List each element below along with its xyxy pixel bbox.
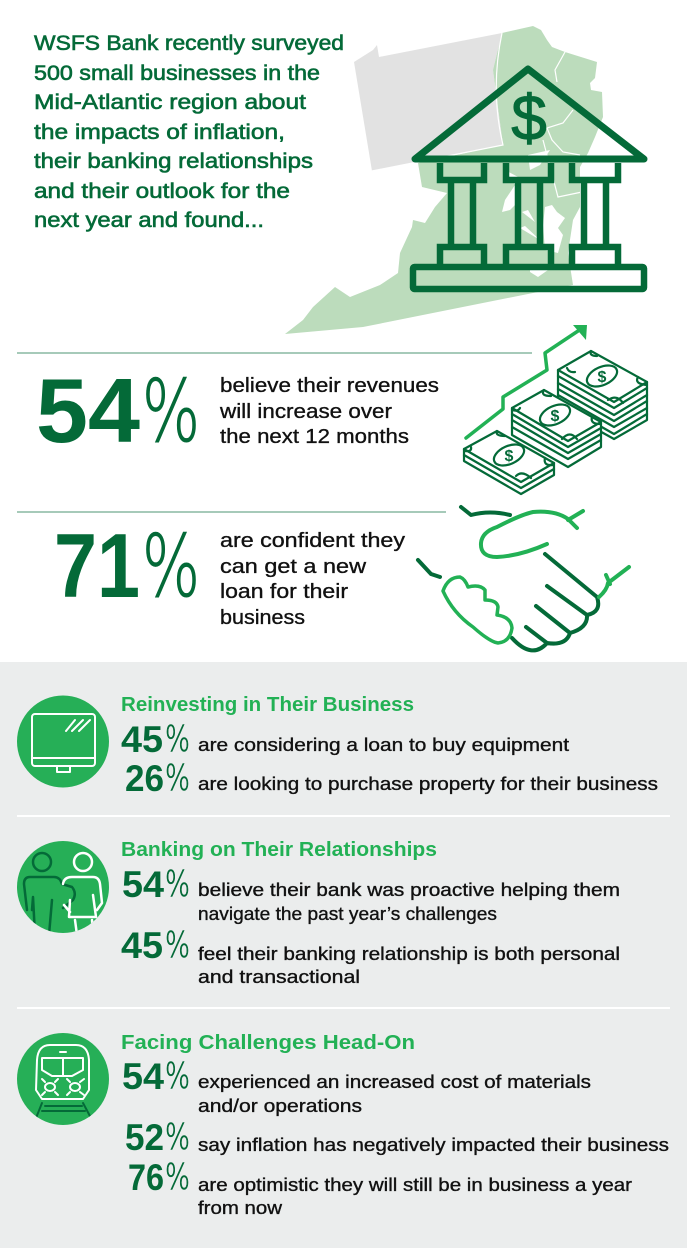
section: Reinvesting in Their Business: are looking to purchase property for their business	[198, 774, 658, 794]
stat: 54% revenues: the next 12 months	[220, 426, 409, 448]
section: Facing Challenges Head-On: experienced an increased cost of materials	[198, 1072, 591, 1092]
stat: 71% loan confidence: 71	[54, 516, 140, 617]
stat: 71% loan confidence: can get a new	[220, 556, 367, 578]
map of the Mid-Atlantic region	[285, 26, 603, 334]
intro text: their banking relationships	[34, 150, 313, 173]
stat: 71% loan confidence	[17, 512, 446, 629]
section: Facing Challenges Head-On: %	[165, 1117, 190, 1158]
section: Facing Challenges Head-On: 52	[125, 1117, 164, 1158]
intro text: WSFS Bank recently surveyed	[34, 32, 344, 55]
section: Banking on Their Relationships: navigate the past year’s challenges	[198, 904, 497, 924]
section: Facing Challenges Head-On: 54	[122, 1056, 164, 1097]
stat: 54% revenues: believe their revenues	[220, 375, 439, 397]
section: Banking on Their Relationships: %	[165, 925, 190, 966]
stat: 71% loan confidence: %	[142, 517, 200, 617]
section: Reinvesting in Their Business: %	[165, 758, 190, 799]
intro text: 500 small businesses in the	[34, 62, 320, 85]
section: Banking on Their Relationships: 45	[121, 925, 163, 966]
section: Banking on Their Relationships	[17, 839, 620, 987]
section: Facing Challenges Head-On: and/or operations	[198, 1096, 362, 1116]
section: Reinvesting in Their Business: Reinvesting in Their Business	[121, 694, 414, 716]
section: Banking on Their Relationships: and transactional	[198, 967, 360, 987]
section: Facing Challenges Head-On: say inflation has negatively impacted their business	[198, 1135, 669, 1155]
stat: 71% loan confidence: loan for their	[220, 581, 348, 603]
icon: handshake	[418, 507, 629, 650]
section: Banking on Their Relationships: feel their banking relationship is both personal	[198, 944, 620, 964]
section: Banking on Their Relationships: 54	[122, 864, 164, 905]
section: Reinvesting in Their Business: are considering a loan to buy equipment	[198, 735, 569, 755]
icon: bank building: $	[511, 82, 547, 154]
section: Banking on Their Relationships: Banking on Their Relationships	[121, 839, 437, 861]
intro text: next year and found...	[34, 209, 264, 232]
section: Reinvesting in Their Business: 45	[121, 719, 163, 760]
section: Banking on Their Relationships: believe their bank was proactive helping them	[198, 880, 620, 900]
intro text: the impacts of inflation,	[34, 121, 285, 144]
stat: 54% revenues: %	[142, 362, 200, 462]
section: Facing Challenges Head-On: %	[165, 1157, 190, 1198]
section: Reinvesting in Their Business: 26	[125, 758, 164, 799]
stat: 54% revenues	[17, 353, 532, 462]
intro text	[34, 32, 344, 232]
section: Facing Challenges Head-On: are optimistic they will still be in business a year	[198, 1175, 632, 1195]
icon: rising arrow and stacks of money	[464, 325, 647, 494]
icon: bank building	[413, 69, 644, 289]
section: Facing Challenges Head-On: from now	[198, 1198, 283, 1218]
section: Reinvesting in Their Business	[17, 694, 658, 799]
section: Facing Challenges Head-On: Facing Challenges Head-On	[121, 1032, 415, 1054]
section: Banking on Their Relationships: %	[165, 864, 190, 905]
intro text: and their outlook for the	[34, 180, 290, 203]
stat: 54% revenues: will increase over	[219, 401, 392, 423]
section: Reinvesting in Their Business: %	[165, 719, 190, 760]
icon: rising arrow and stacks of money: $	[598, 369, 607, 386]
icon: rising arrow and stacks of money: $	[505, 448, 514, 465]
stat: 54% revenues: 54	[36, 361, 140, 462]
panel: survey findings background	[0, 662, 687, 1248]
section: Facing Challenges Head-On: %	[165, 1056, 190, 1097]
section: Facing Challenges Head-On	[17, 1032, 669, 1218]
stat: 71% loan confidence: business	[220, 607, 305, 629]
intro text: Mid-Atlantic region about	[34, 91, 306, 114]
icon: rising arrow and stacks of money: $	[551, 408, 560, 425]
stat: 71% loan confidence: are confident they	[220, 530, 405, 552]
section: Facing Challenges Head-On: 76	[128, 1157, 164, 1198]
